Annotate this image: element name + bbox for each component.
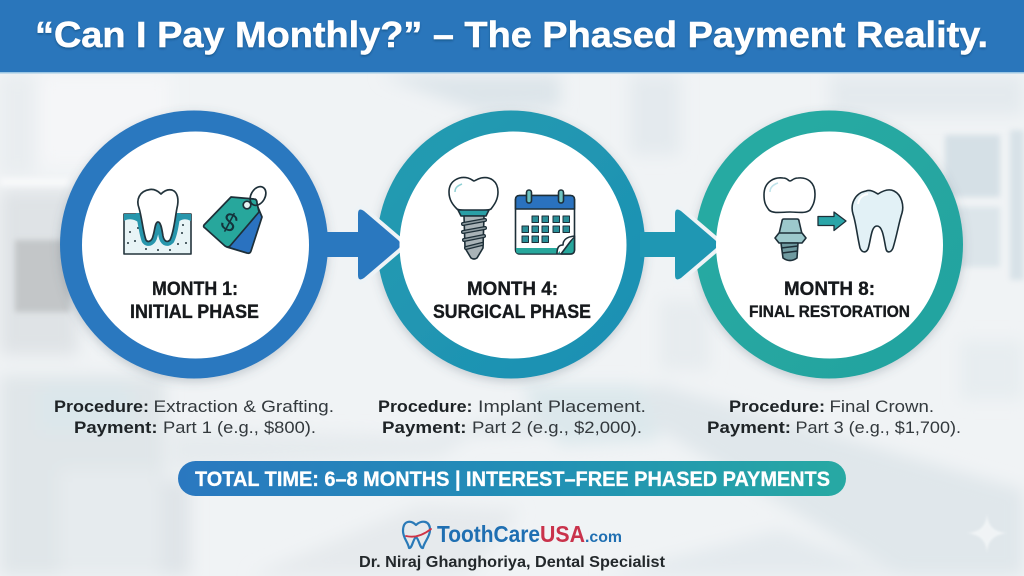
text block: month 4 details: Part 2 (e.g., $2,000). [472, 418, 642, 437]
icon: calendar [516, 190, 574, 254]
icon: price tags: $ [216, 205, 243, 239]
text block: month 8 details: Procedure: [729, 397, 825, 416]
title: “Can I Pay Monthly?” – The Phased Payment Reality. [35, 14, 988, 55]
icon: crown and abutment [764, 178, 815, 260]
label: month 1: MONTH 1: [152, 278, 238, 300]
icon: finished tooth [852, 190, 903, 252]
label: month 1: INITIAL PHASE [130, 301, 259, 323]
label: month 4 [433, 278, 591, 323]
panel: month 8 circle [640, 110, 963, 378]
label: month 8 [749, 278, 910, 321]
panel: month 1 circle [60, 110, 328, 378]
panel: month 2 circle [320, 110, 645, 378]
text block: month 1 details: Part 1 (e.g., $800). [163, 418, 316, 437]
text block: month 4 details: Procedure: [378, 397, 472, 416]
text block: month 1 details: Procedure: [54, 397, 149, 416]
icon: small arrow [818, 212, 846, 230]
text block: month 8 details: Final Crown. [830, 397, 934, 416]
logo: ToothCareUSA.com: ToothCare [437, 521, 540, 547]
label: month 4: SURGICAL PHASE [433, 301, 591, 323]
icon: price tags [204, 184, 269, 253]
text block: month 1 details: Extraction & Grafting. [154, 397, 334, 416]
text block: month 8 details [707, 397, 961, 437]
logo: ToothCareUSA.com [403, 521, 622, 548]
label: month 8: FINAL RESTORATION [749, 303, 910, 321]
label: month 8: MONTH 8: [784, 278, 875, 300]
arrow: month 2 to month 3 [640, 210, 718, 279]
text block: month 4 details [378, 397, 646, 437]
text block: month 1 details: Payment: [74, 418, 158, 437]
arrow: month 1 to month 2 [320, 210, 400, 279]
sparkle watermark [967, 514, 1007, 553]
summary pill: TOTAL TIME: 6–8 MONTHS | INTEREST–FREE PHASED PAYMENTS [195, 468, 830, 491]
header banner [0, 0, 1024, 74]
author credit: Dr. Niraj Ghanghoriya, Dental Specialist [359, 554, 666, 571]
icon: implant [449, 178, 498, 259]
icon: tooth in gum [124, 189, 191, 254]
text block: month 8 details: Part 3 (e.g., $1,700). [796, 418, 961, 437]
text block: month 1 details [54, 397, 334, 437]
summary pill [178, 461, 846, 496]
icon: tooth logo [403, 522, 431, 548]
text block: month 4 details: Payment: [382, 418, 466, 437]
text block: month 4 details: Implant Placement. [478, 397, 646, 416]
label: month 1 [130, 278, 259, 323]
logo: ToothCareUSA.com: .com [585, 529, 622, 546]
text block: month 8 details: Payment: [707, 418, 791, 437]
label: month 4: MONTH 4: [467, 278, 558, 300]
logo: ToothCareUSA.com: USA [540, 521, 585, 547]
